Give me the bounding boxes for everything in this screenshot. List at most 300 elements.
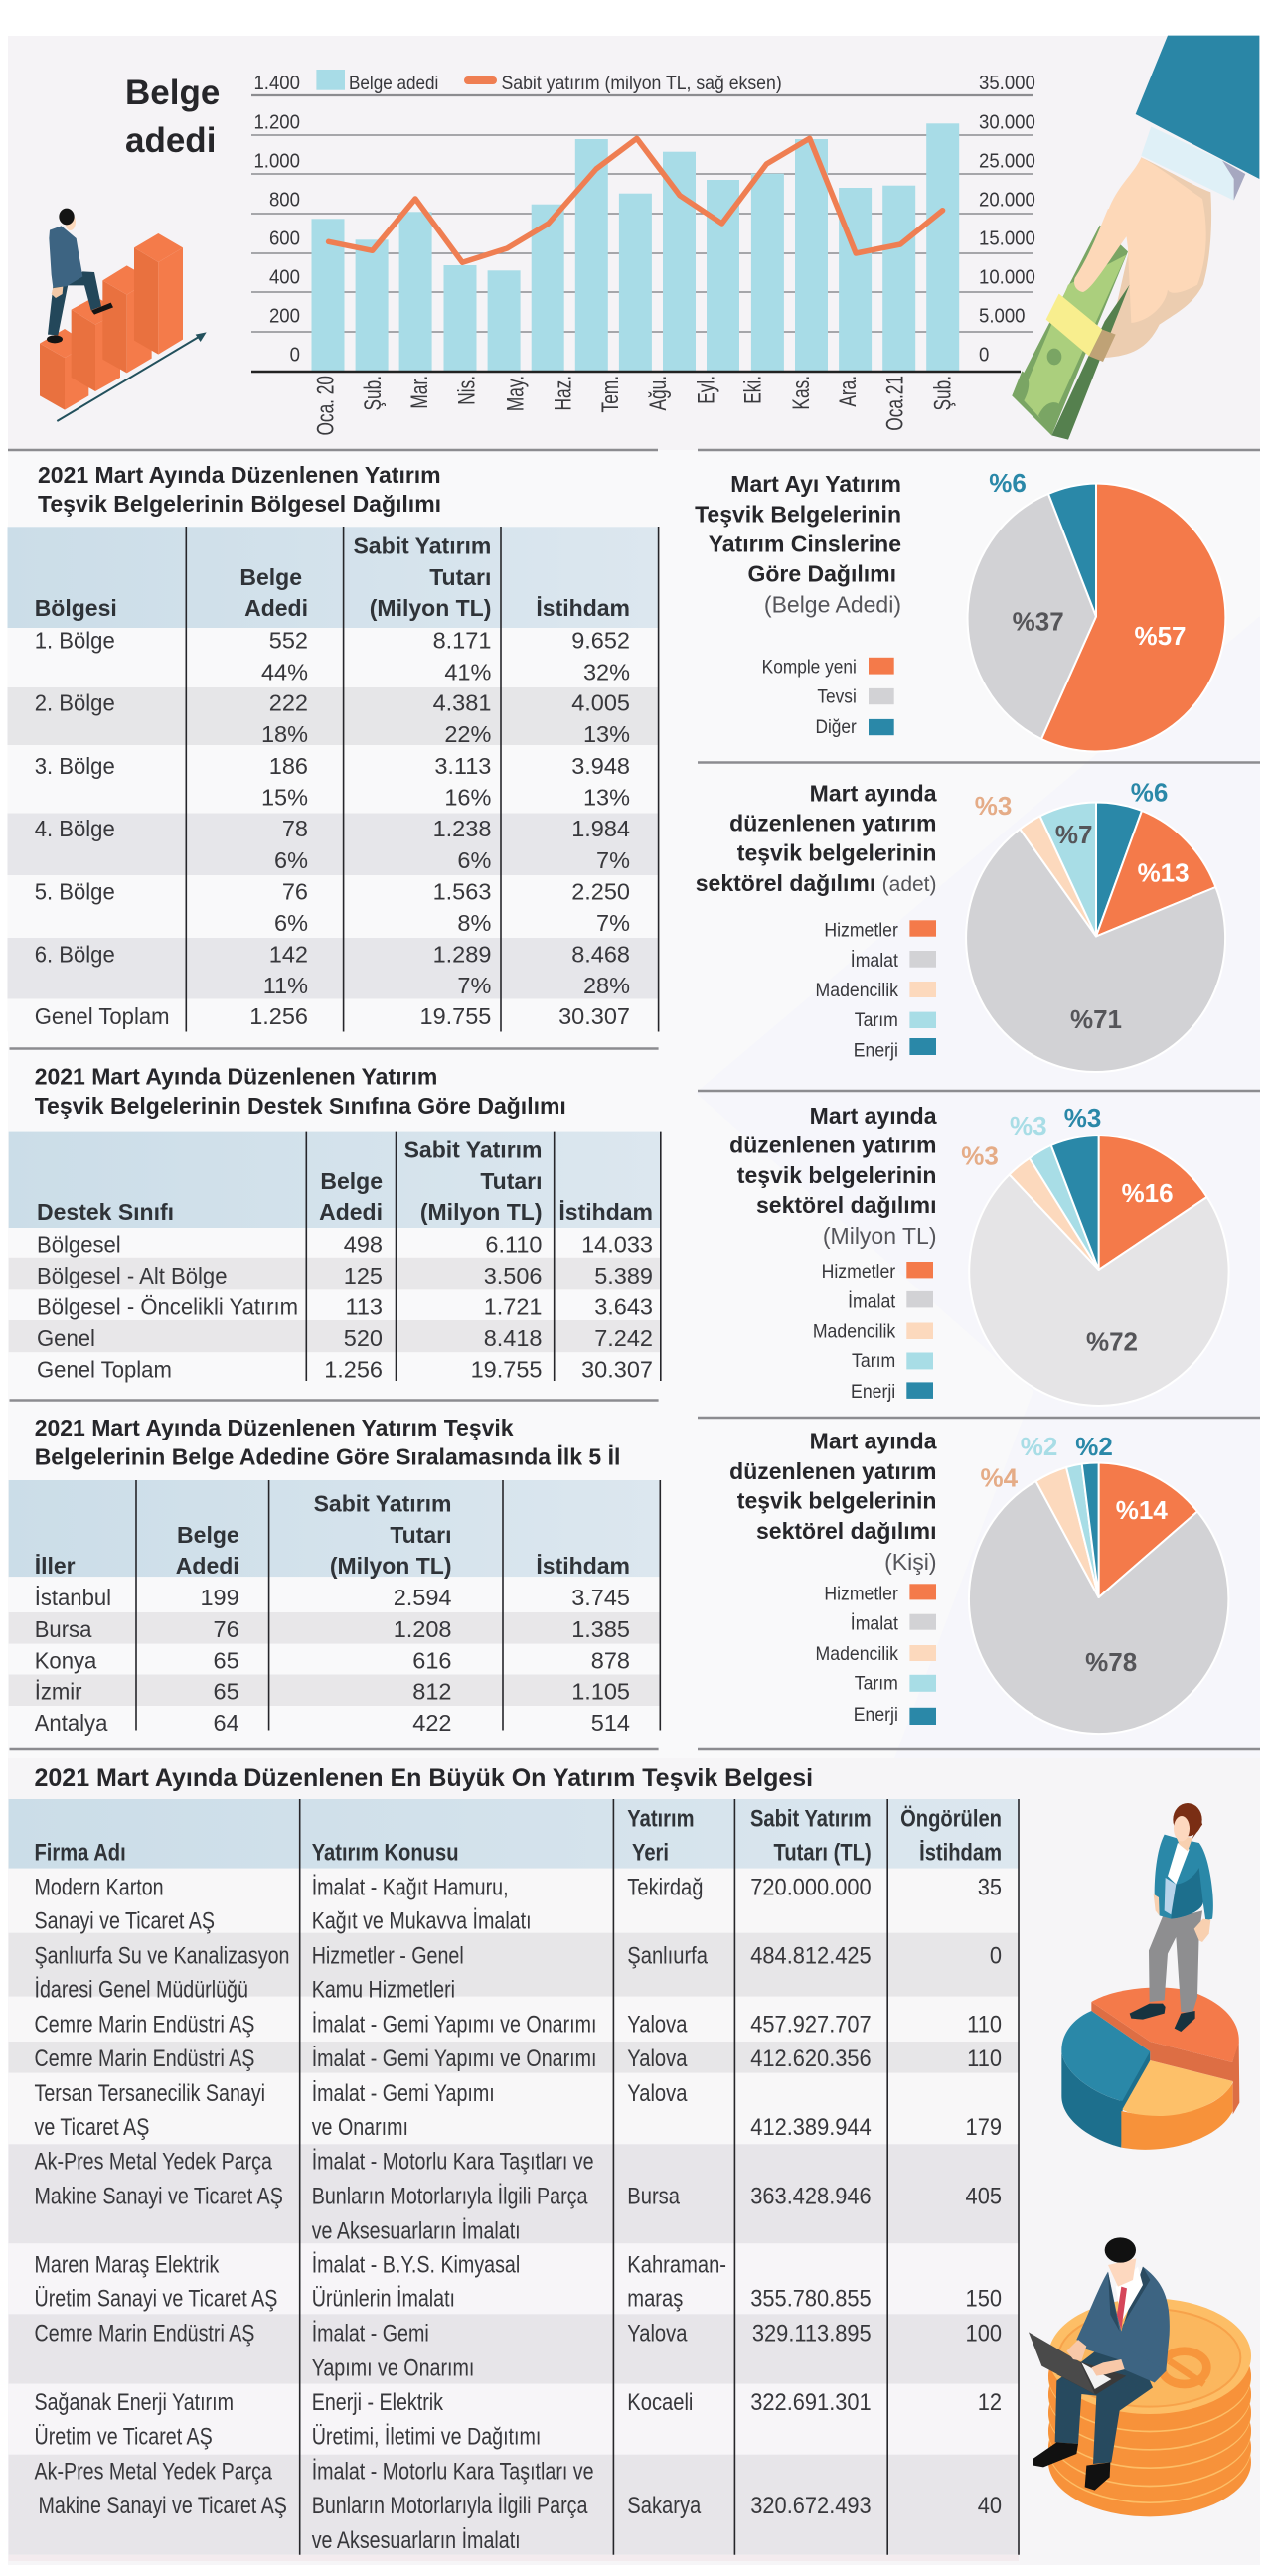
table rows: 514 [591,1710,630,1736]
legend [316,70,782,93]
title: sektörel dağılımı [756,1192,936,1218]
heading: 2021 Mart Ayında Düzenlenen Yatırım Teşvik [35,1415,514,1440]
table rows: 1.238 [433,816,491,841]
pie chart [968,468,1225,751]
sabit yatırım tutarı column: 329.113.895 [752,2320,872,2347]
table header: Adedi [244,595,308,621]
öngörülen istihdam column: 110 [967,2045,1002,2071]
heading [35,1415,620,1470]
table header: Sabit Yatırım [353,532,491,558]
table rows: 222 [269,690,308,716]
title [695,471,901,618]
legend [816,919,936,1061]
table rows: 1.208 [394,1616,451,1642]
öngörülen istihdam column: 0 [990,1942,1002,1969]
pie chart: %3 [1010,1111,1047,1140]
right axis labels: 0 [979,345,989,366]
month labels: Mar. [406,376,433,409]
table rows: 520 [344,1325,383,1351]
table rows: Bursa [35,1615,92,1642]
firma adı column: Üretim Sanayi ve Ticaret AŞ [35,2285,277,2312]
table header: Tutarı [429,564,491,590]
panel: yatırım cinsi pie [695,468,1225,751]
left axis labels: 1.200 [253,112,300,133]
table rows: 13% [583,785,630,811]
title [729,1429,937,1575]
table header [35,532,630,621]
table rows: 30.307 [558,1003,630,1029]
sabit yatırım tutarı column: 720.000.000 [750,1873,872,1900]
title: Mart ayında [810,1429,937,1454]
title: Mart ayında [810,780,937,806]
left axis labels: 1.000 [253,151,300,172]
firma adı column: Makine Sanayi ve Ticaret AŞ [39,2492,287,2518]
table rows: 1.984 [571,816,630,841]
table rows: 422 [412,1710,451,1736]
yatırım konusu column [312,1873,596,2553]
pie chart: %4 [981,1462,1019,1492]
yatırım konusu column: Bunların Motorlarıyla İlgili Parça [312,2182,588,2209]
title: Yatırım Cinslerine [709,530,901,556]
heading: 2021 Mart Ayında Düzenlenen Yatırım [38,462,441,488]
yatırım konusu column: İmalat - B.Y.S. Kimyasal [312,2251,520,2278]
table rows: 78 [282,816,308,841]
table header: Tutarı [390,1522,451,1548]
pie chart: %14 [1116,1495,1168,1525]
table rows: Antalya [35,1709,108,1736]
table rows: 3.506 [484,1263,543,1288]
pie chart: %7 [1055,820,1092,849]
pie chart: %16 [1122,1178,1174,1208]
title: düzenlenen yatırım [729,1133,936,1158]
title: Mart Ayı Yatırım [730,471,901,497]
firma adı column [34,1873,289,2518]
yatırım konusu column: Yapımı ve Onarımı [312,2354,474,2381]
table rows: 16% [444,785,491,811]
month labels: Ara. [835,376,862,407]
table rows: Genel Toplam [35,1002,170,1029]
pie chart: %2 [1075,1432,1113,1461]
table rows: 8% [457,910,492,936]
firma adı column: Makine Sanayi ve Ticaret AŞ [35,2182,283,2209]
table rows: 30.307 [581,1357,653,1383]
month labels [313,376,956,436]
pie chart: %3 [975,791,1012,821]
table rows: 3. Bölge [35,752,115,779]
firma adı column: Şanlıurfa Su ve Kanalizasyon [35,1942,289,1969]
pie chart: %2 [1021,1432,1057,1461]
table rows: Genel Toplam [37,1356,172,1383]
yatırım konusu column: İmalat - Motorlu Kara Taşıtları ve [312,2147,594,2175]
table header: İstihdam [558,1199,653,1225]
table rows [35,627,630,1029]
illustration: man climbing orange bars [40,209,207,421]
line: sabit yatırım [329,138,943,262]
legend: Madencilik [816,979,899,1000]
illustration: hand holding money [1012,36,1259,440]
table rows: 5.389 [594,1263,653,1288]
title: (Milyon TL) [823,1223,936,1249]
firma adı column: ve Ticaret AŞ [35,2113,149,2140]
panel: sektörel dağılım milyon TL pie [729,1103,1229,1406]
table rows: 4. Bölge [35,815,115,841]
title: teşvik belgelerinin [737,1487,936,1513]
heading: Teşvik Belgelerinin Destek Sınıfına Göre Dağılımı [35,1093,566,1119]
legend [816,1583,936,1725]
heading: 2021 Mart Ayında Düzenlenen En Büyük On Yatırım Teşvik Belgesi [34,1764,813,1792]
table rows: 76 [214,1616,239,1642]
legend: Diğer [815,716,857,737]
heading: 2021 Mart Ayında Düzenlenen Yatırım [35,1063,437,1089]
table rows: 1.256 [249,1003,308,1029]
month labels: Tem. [597,376,624,412]
month labels: Nis. [454,376,480,405]
yatırım yeri column: Tekirdağ [627,1874,703,1900]
table header: Belge [320,1168,383,1194]
table header: Belge [239,564,302,590]
pie chart [969,1432,1228,1734]
table header: (Milyon TL) [330,1553,451,1579]
table rows: 22% [444,721,491,747]
yatırım konusu column: İmalat - Gemi Yapımı ve Onarımı [312,2045,596,2071]
month labels: Şub. [360,376,387,411]
pie chart: %3 [1064,1103,1101,1133]
yatırım konusu column: ve Aksesuarların İmalatı [312,2526,521,2553]
panel: sektörel dağılım kişi pie [729,1429,1228,1734]
yatırım yeri column: Yalova [627,2079,688,2106]
title: sektörel dağılımı [756,1518,936,1544]
table header: Bölgesi [35,595,117,621]
title: Mart ayında [810,1103,937,1129]
table rows: 4.381 [433,690,491,716]
legend: Hizmetler [822,1260,895,1282]
table header [34,1805,1002,1866]
month labels: Kas. [788,376,815,410]
yatırım konusu column: Enerji - Elektrik [312,2388,443,2415]
firma adı column: Cemre Marin Endüstri AŞ [35,2045,254,2071]
sabit yatırım tutarı column: 363.428.946 [750,2182,872,2209]
table header [37,1137,653,1225]
table: en büyük on yatırım [9,1764,1019,2561]
left axis labels: 800 [269,190,300,211]
pie chart [966,777,1225,1072]
table rows [35,1584,630,1736]
yatırım yeri column: maraş [627,2285,683,2312]
yatırım konusu column: ve Onarımı [312,2113,408,2140]
yatırım yeri column: Yalova [627,2011,688,2038]
yatırım konusu column: İmalat - Gemi Yapımı [312,2079,495,2106]
table rows: 6. Bölge [35,941,115,968]
yatırım yeri column: Şanlıurfa [627,1942,709,1969]
table: ilk 5 il [9,1415,661,1736]
table rows: Konya [35,1647,97,1674]
firma adı column: Modern Karton [35,1873,164,1900]
left axis labels: 0 [290,345,300,366]
legend [813,1260,933,1402]
heading [35,1063,566,1119]
table rows: Bölgesel - Alt Bölge [37,1262,227,1288]
öngörülen istihdam column: 100 [966,2320,1002,2347]
table header: Adedi [319,1199,383,1225]
sabit yatırım tutarı column: 412.620.356 [750,2045,872,2071]
table header: Adedi [176,1553,239,1579]
table rows: 8.418 [484,1325,543,1351]
table rows: 199 [200,1585,239,1610]
right axis labels: 5.000 [979,306,1026,327]
title: Teşvik Belgelerinin [695,501,901,527]
table header: İstihdam [536,1553,630,1579]
yatırım yeri column: Sakarya [627,2492,702,2518]
table rows: 41% [444,660,491,685]
illustration: man with laptop on coin stack [1029,2237,1251,2516]
legend: Belge adedi [349,73,438,93]
table rows: 3.948 [571,753,630,779]
right axis labels: 10.000 [979,267,1035,289]
legend: Madencilik [816,1642,899,1664]
table rows: 616 [412,1647,451,1673]
table rows: 7% [596,910,630,936]
right axis labels: 25.000 [979,151,1035,172]
sabit yatırım tutarı column: 457.927.707 [750,2010,872,2038]
firma adı column: Maren Maraş Elektrik [35,2251,219,2278]
table rows: 142 [269,941,308,967]
legend: Tevsi [817,686,857,707]
table header: Öngörülen [900,1805,1002,1832]
yatırım konusu column: Kamu Hizmetleri [312,1976,455,2003]
table rows: 15% [261,785,308,811]
month labels: Eyl. [694,376,719,404]
table rows: 6% [274,847,308,873]
left axis labels: 600 [269,228,300,250]
yatırım konusu column: Bunların Motorlarıyla İlgili Parça [312,2492,588,2518]
öngörülen istihdam column: 35 [978,1873,1002,1900]
title: teşvik belgelerinin [737,1162,936,1188]
table header: Tutarı [480,1168,543,1194]
legend: İmalat [851,1612,898,1634]
table rows: İstanbul [35,1584,111,1610]
öngörülen istihdam column: 179 [966,2113,1002,2140]
month labels: Haz. [551,376,576,411]
right axis labels: 35.000 [979,73,1035,94]
heading: Teşvik Belgelerinin Bölgesel Dağılımı [38,491,441,517]
heading: Belge adedi: Belge [125,74,220,112]
yatırım konusu column: İmalat - Kağıt Hamuru, [312,1873,509,1900]
öngörülen istihdam column: 150 [966,2285,1002,2312]
table rows: 3.745 [571,1585,630,1610]
table rows: 3.113 [434,753,491,779]
table rows: 113 [346,1294,383,1320]
illustration: woman standing on pie chart [1061,1803,1239,2150]
yatırım konusu column: Üretimi, İletimi ve Dağıtımı [312,2423,541,2450]
sabit yatırım tutarı column [750,1873,872,2518]
table rows: 11% [263,973,308,998]
table rows: 64 [214,1710,239,1736]
sabit yatırım tutarı column: 412.389.944 [750,2113,872,2140]
table header: İller [35,1553,76,1579]
table rows: 1.256 [324,1357,383,1383]
left axis labels [253,73,300,366]
table header: Tutarı (TL) [774,1839,872,1866]
öngörülen istihdam column: 12 [978,2388,1002,2415]
yatırım konusu column: Ürünlerin İmalatı [312,2285,455,2312]
firma adı column: Üretim ve Ticaret AŞ [35,2423,213,2450]
legend: Hizmetler [824,919,898,941]
table rows: 2.250 [571,878,630,904]
firma adı column: Ak-Pres Metal Yedek Parça [35,2458,273,2485]
heading: Belgelerinin Belge Adedine Göre Sıralamasında İlk 5 İl [35,1444,620,1470]
pie chart: %72 [1086,1327,1138,1357]
table rows: 8.171 [433,628,491,654]
pie chart: %37 [1013,606,1064,636]
table header: Yeri [632,1839,669,1866]
legend: Madencilik [813,1320,896,1342]
left axis labels: 1.400 [253,73,300,94]
pie chart: %6 [1131,777,1168,807]
legend: Komple yeni [762,657,857,677]
table rows: Bölgesel [37,1231,121,1257]
pie chart: %6 [989,468,1027,498]
table rows: 498 [344,1231,383,1257]
table rows: 14.033 [581,1231,653,1257]
table header: Sabit Yatırım [314,1490,451,1516]
title: teşvik belgelerinin [737,839,936,865]
table rows: 19.755 [471,1357,543,1383]
legend: İmalat [848,1290,895,1312]
title: düzenlenen yatırım [729,811,936,836]
title: sektörel dağılımı (adet) [696,870,936,896]
table rows: 4.005 [571,690,630,716]
table rows: 2. Bölge [35,689,115,716]
table rows: 18% [261,721,308,747]
pie chart [961,1103,1229,1406]
yatırım yeri column: Yalova [627,2320,688,2347]
month labels: Ağu. [645,376,672,411]
legend: Tarım [852,1349,895,1371]
table rows: İzmir [35,1678,82,1705]
month labels: Eki. [740,376,766,404]
yatırım yeri column: Bursa [627,2183,681,2209]
month labels: Oca.21 [882,376,908,431]
öngörülen istihdam column: 405 [966,2182,1002,2209]
yatırım konusu column: İmalat - Gemi [312,2320,429,2347]
sabit yatırım tutarı column: 322.691.301 [750,2388,872,2415]
month labels: Şub. [930,376,956,411]
title [696,780,937,896]
table rows: 7.242 [594,1325,653,1351]
sabit yatırım tutarı column: 484.812.425 [750,1942,872,1969]
firma adı column: Sağanak Enerji Yatırım [35,2388,234,2415]
table header: Firma Adı [34,1839,126,1866]
right axis labels [979,73,1035,366]
table rows: 3.643 [594,1294,653,1320]
legend: Enerji [851,1380,895,1402]
legend: İmalat [851,949,898,971]
firma adı column: İdaresi Genel Müdürlüğü [35,1976,248,2003]
table rows: 65 [214,1647,239,1673]
table header: Yatırım [627,1805,695,1832]
pie chart: %57 [1134,621,1187,651]
title [729,1103,937,1249]
legend: Enerji [854,1039,898,1061]
table rows: 878 [591,1647,630,1673]
left axis labels: 400 [269,267,300,289]
firma adı column: Cemre Marin Endüstri AŞ [35,2320,254,2347]
legend: Tarım [855,1008,898,1030]
panel: sektörel dağılım adet pie [696,777,1225,1072]
table rows: 186 [269,753,308,779]
table rows: 65 [214,1679,239,1705]
yatırım konusu column: İmalat - Gemi Yapımı ve Onarımı [312,2010,596,2038]
öngörülen istihdam column [966,1873,1002,2518]
panel: belge adedi chart [40,36,1259,440]
öngörülen istihdam column: 110 [967,2010,1002,2038]
table rows: 1.385 [571,1616,630,1642]
table rows: 1. Bölge [35,627,115,654]
table rows: 812 [412,1679,451,1705]
legend: Hizmetler [824,1583,898,1604]
title: düzenlenen yatırım [729,1458,936,1484]
table rows: Genel [37,1324,95,1351]
table rows: Bölgesel - Öncelikli Yatırım [37,1293,298,1320]
table rows: 28% [583,973,630,998]
firma adı column: Sanayi ve Ticaret AŞ [35,1907,215,1934]
legend: Sabit yatırım (milyon TL, sağ eksen) [502,72,782,93]
yatırım yeri column: Kocaeli [627,2388,693,2415]
table header: İstihdam [536,595,630,621]
pie chart: %71 [1070,1004,1122,1034]
table rows: 1.563 [433,878,491,904]
table rows [37,1231,653,1383]
table rows: 7% [596,847,630,873]
table rows: 6% [457,847,492,873]
right axis labels: 20.000 [979,190,1035,211]
legend: Tarım [855,1672,898,1694]
month labels: May. [503,376,529,411]
table rows: 6% [274,910,308,936]
table header: İstihdam [919,1839,1002,1866]
table header [35,1490,630,1579]
table rows: 32% [583,660,630,685]
month labels: Oca. 20 [313,376,339,436]
table rows: 19.755 [420,1003,491,1029]
table header: (Milyon TL) [370,595,491,621]
yatırım konusu column: İmalat - Motorlu Kara Taşıtları ve [312,2458,594,2485]
sabit yatırım tutarı column: 320.672.493 [750,2492,872,2518]
table rows: 76 [282,878,308,904]
table rows: 552 [269,628,308,654]
legend: Enerji [854,1703,898,1725]
table rows: 9.652 [571,628,630,654]
title: Göre Dağılımı [747,560,896,586]
heading: Belge adedi: adedi [125,121,216,160]
table rows: 6.110 [485,1231,543,1257]
pie chart: %13 [1138,858,1190,888]
right axis labels: 15.000 [979,228,1035,250]
yatırım yeri column [627,1874,726,2518]
yatırım yeri column: Kahraman- [627,2251,726,2278]
table rows: 1.721 [484,1294,543,1320]
öngörülen istihdam column: 40 [978,2492,1002,2518]
pie chart: %78 [1085,1647,1137,1677]
table header: Destek Sınıfı [37,1199,174,1225]
yatırım yeri column: Yalova [627,2045,688,2071]
table rows: 1.289 [433,941,491,967]
left axis labels: 200 [269,306,300,327]
table: bölgesel dağılım [8,462,659,1031]
table header: Sabit Yatırım [404,1137,543,1163]
table header: (Milyon TL) [420,1199,543,1225]
right axis labels: 30.000 [979,112,1035,133]
